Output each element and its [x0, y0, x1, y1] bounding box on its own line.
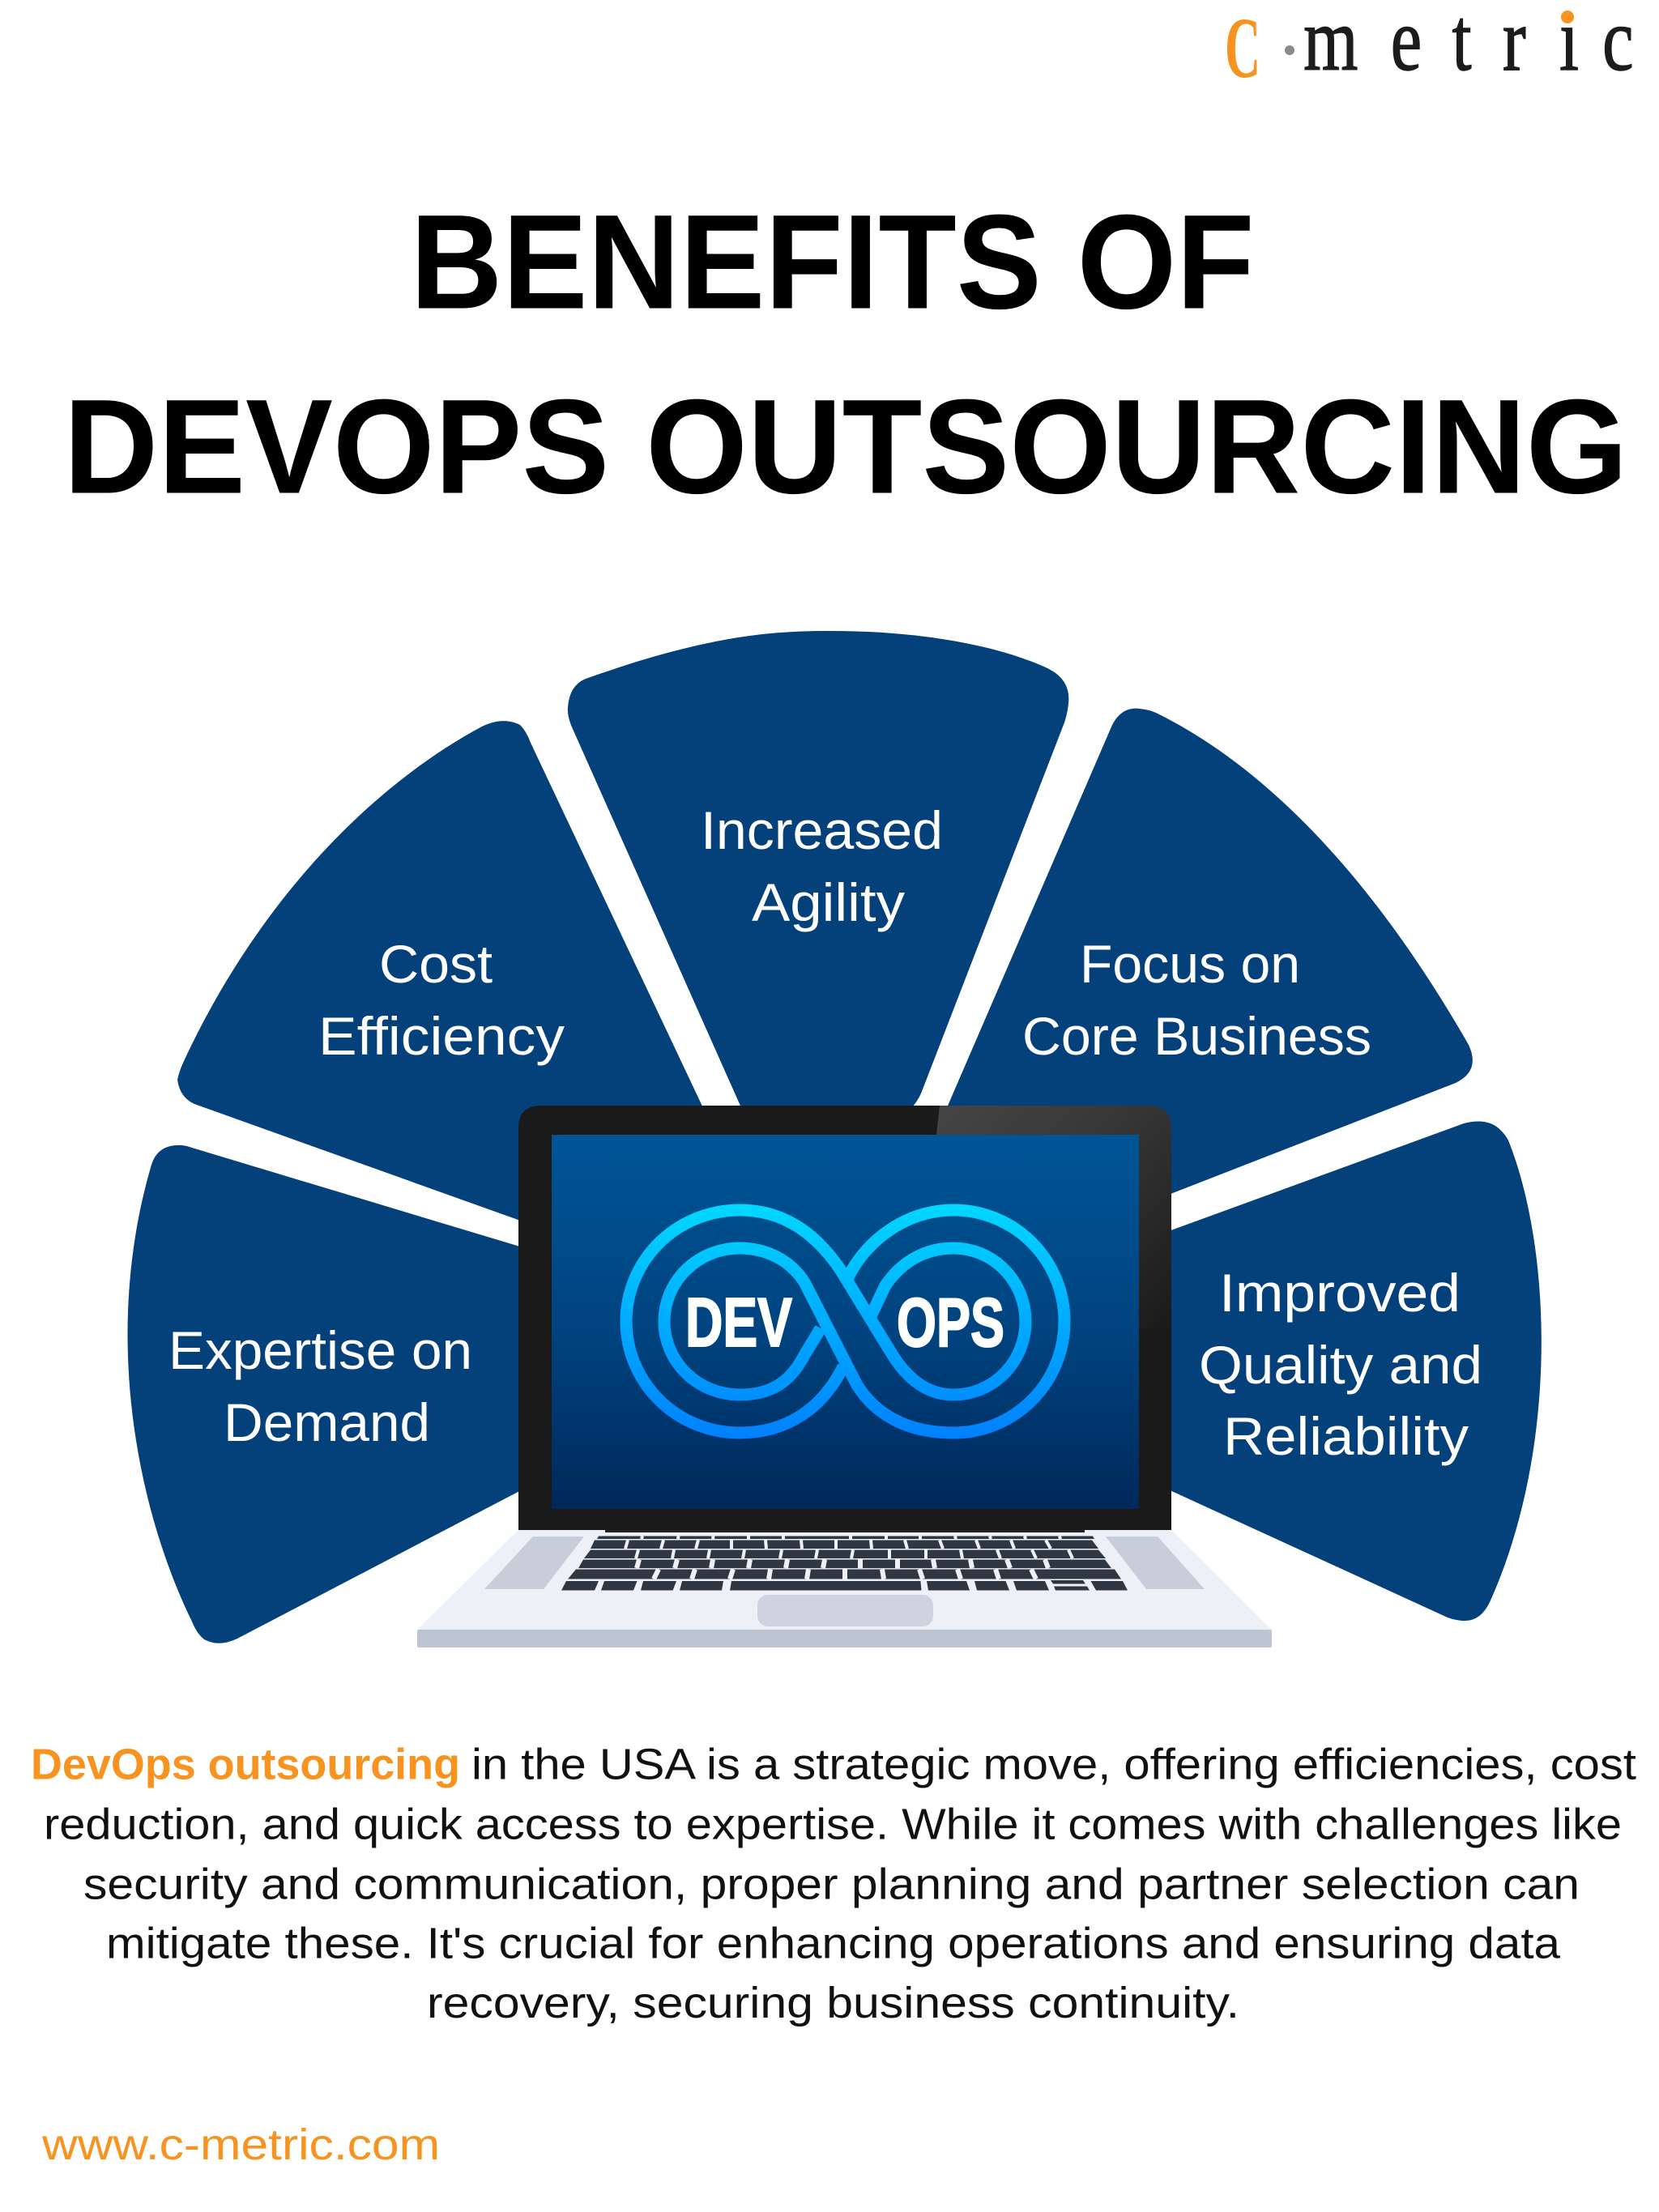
- wedge panel: Improved Quality and Reliability: Reliability: [1223, 1406, 1469, 1466]
- wedge panel: Focus on Core Business: Focus on: [1080, 934, 1300, 994]
- wedge panel: Improved Quality and Reliability: Improved: [1219, 1263, 1461, 1323]
- wedge panel: Focus on Core Business: Core Business: [1022, 1006, 1371, 1066]
- DEV OPS label: [685, 1285, 1004, 1362]
- wedge panel: Cost Efficiency: Efficiency: [318, 1006, 565, 1066]
- summary paragraph: reduction, and quick access to expertise. While it comes with challenges like: [44, 1800, 1622, 1848]
- screen: [552, 1135, 1139, 1509]
- title: [63, 188, 1628, 522]
- wedge panel: Improved Quality and Reliability: [1166, 1122, 1542, 1621]
- laptop front edge: [417, 1630, 1272, 1647]
- wedge panel: Increased Agility: Agility: [752, 872, 905, 932]
- summary paragraph: in the USA is a strategic move, offering efficiencies, cost: [471, 1740, 1636, 1788]
- wedge panel: Cost Efficiency: [177, 721, 705, 1231]
- lid highlight: [936, 1106, 1171, 1328]
- wedge panel: Expertise on Demand: Expertise on: [168, 1320, 472, 1380]
- wedge panel: Focus on Core Business: [945, 709, 1473, 1239]
- infinity loop: [626, 1210, 1064, 1433]
- laptop lid: [518, 1106, 1171, 1530]
- summary paragraph: recovery, securing business continuity.: [427, 1979, 1239, 2027]
- speaker right: [1106, 1536, 1205, 1589]
- title: BENEFITS OF: [410, 188, 1254, 337]
- speaker left: [484, 1536, 584, 1589]
- laptop base: [417, 1530, 1272, 1630]
- wedge panel: Improved Quality and Reliability: Quality and: [1199, 1335, 1482, 1395]
- website url: www.c-metric.com: [41, 2120, 440, 2169]
- trackpad: [757, 1595, 933, 1626]
- wedge panel: Expertise on Demand: Demand: [224, 1392, 430, 1452]
- wedge panel: Increased Agility: [568, 631, 1068, 1111]
- DEV OPS label: OPS: [897, 1285, 1004, 1362]
- logo: c-metric: C: [1225, 0, 1260, 96]
- summary paragraph: security and communication, proper planning and partner selection can: [83, 1860, 1580, 1908]
- title: DEVOPS OUTSOURCING: [63, 373, 1628, 522]
- keyboard: [561, 1536, 1128, 1591]
- wedge panel: Expertise on Demand: [128, 1145, 522, 1643]
- summary paragraph: mitigate these. It's crucial for enhancing operations and ensuring data: [106, 1920, 1561, 1968]
- wedge panel: Increased Agility: Increased: [701, 800, 943, 860]
- key gaps: [625, 1536, 1073, 1558]
- key rows: [561, 1536, 1128, 1591]
- wedge panel: Cost Efficiency: Cost: [379, 934, 493, 994]
- laptop illustration: [417, 1106, 1272, 1647]
- hinge: [605, 1530, 1085, 1532]
- summary paragraph: DevOps outsourcing: [31, 1740, 460, 1788]
- summary paragraph: [31, 1740, 1636, 2027]
- DEV OPS label: DEV: [685, 1285, 792, 1362]
